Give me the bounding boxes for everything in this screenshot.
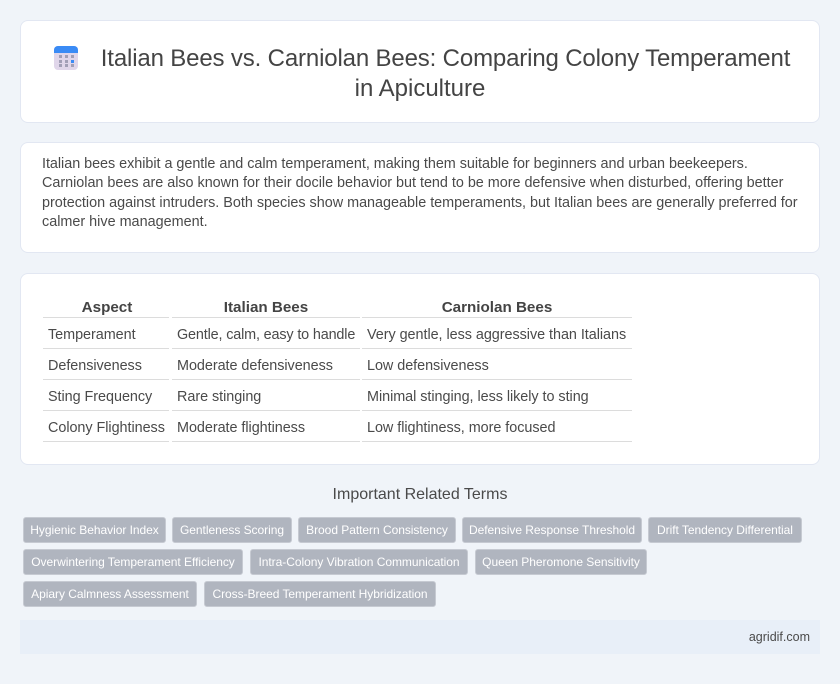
related term tags: Brood Pattern Consistency [306,523,448,537]
comparison table: Temperament [48,327,136,343]
related term tags [23,517,802,607]
title: in Apiculture [355,75,485,102]
comparison table: Rare stinging [177,389,261,405]
related term tags: Overwintering Temperament Efficiency [31,555,235,569]
comparison table [43,299,632,442]
related term tags: Gentleness Scoring [180,523,284,537]
comparison table: Defensiveness [48,358,142,374]
icon: calendar [54,46,78,70]
heading: related terms: Important Related Terms [333,486,507,503]
related term tags: Queen Pheromone Sensitivity [482,555,640,569]
panel: description card [20,142,820,253]
comparison table: Gentle, calm, easy to handle [177,327,355,343]
related term tags: Defensive Response Threshold [469,523,635,537]
comparison table: Italian Bees [224,299,308,316]
text block: description: protection against intruders. Both species show manageable temperaments, but Italian bees are generally preferred for [42,195,798,211]
panel: comparison table card [20,273,820,465]
related term tags: Intra-Colony Vibration Communication [258,555,460,569]
related term tags: Apiary Calmness Assessment [31,587,189,601]
comparison table: Carniolan Bees [442,299,552,316]
text block: description: Carniolan bees are also known for their docile behavior but tend to be more defensive when disturbed, offering better [42,175,783,191]
comparison table: Very gentle, less aggressive than Italians [367,327,626,343]
related term tags: Cross-Breed Temperament Hybridization [212,587,428,601]
related term tags: Drift Tendency Differential [657,523,793,537]
panel: title card [20,20,820,123]
comparison table: Moderate flightiness [177,420,305,436]
comparison table: Colony Flightiness [48,420,165,436]
comparison table: Sting Frequency [48,389,152,405]
text block: description: Italian bees exhibit a gentle and calm temperament, making them suitable for beginners and urban beekeepers. [42,156,748,172]
text block: description [42,156,798,230]
comparison table: Low flightiness, more focused [367,420,555,436]
footer bar [20,620,820,654]
footer source label: agridif.com [749,630,810,644]
comparison table: Aspect [82,299,132,316]
title [101,45,790,102]
comparison table: Moderate defensiveness [177,358,333,374]
text block: description: calmer hive management. [42,214,208,230]
comparison table: Minimal stinging, less likely to sting [367,389,589,405]
related term tags: Hygienic Behavior Index [30,523,159,537]
title: Italian Bees vs. Carniolan Bees: Comparing Colony Temperament [101,45,790,72]
comparison table: Low defensiveness [367,358,489,374]
